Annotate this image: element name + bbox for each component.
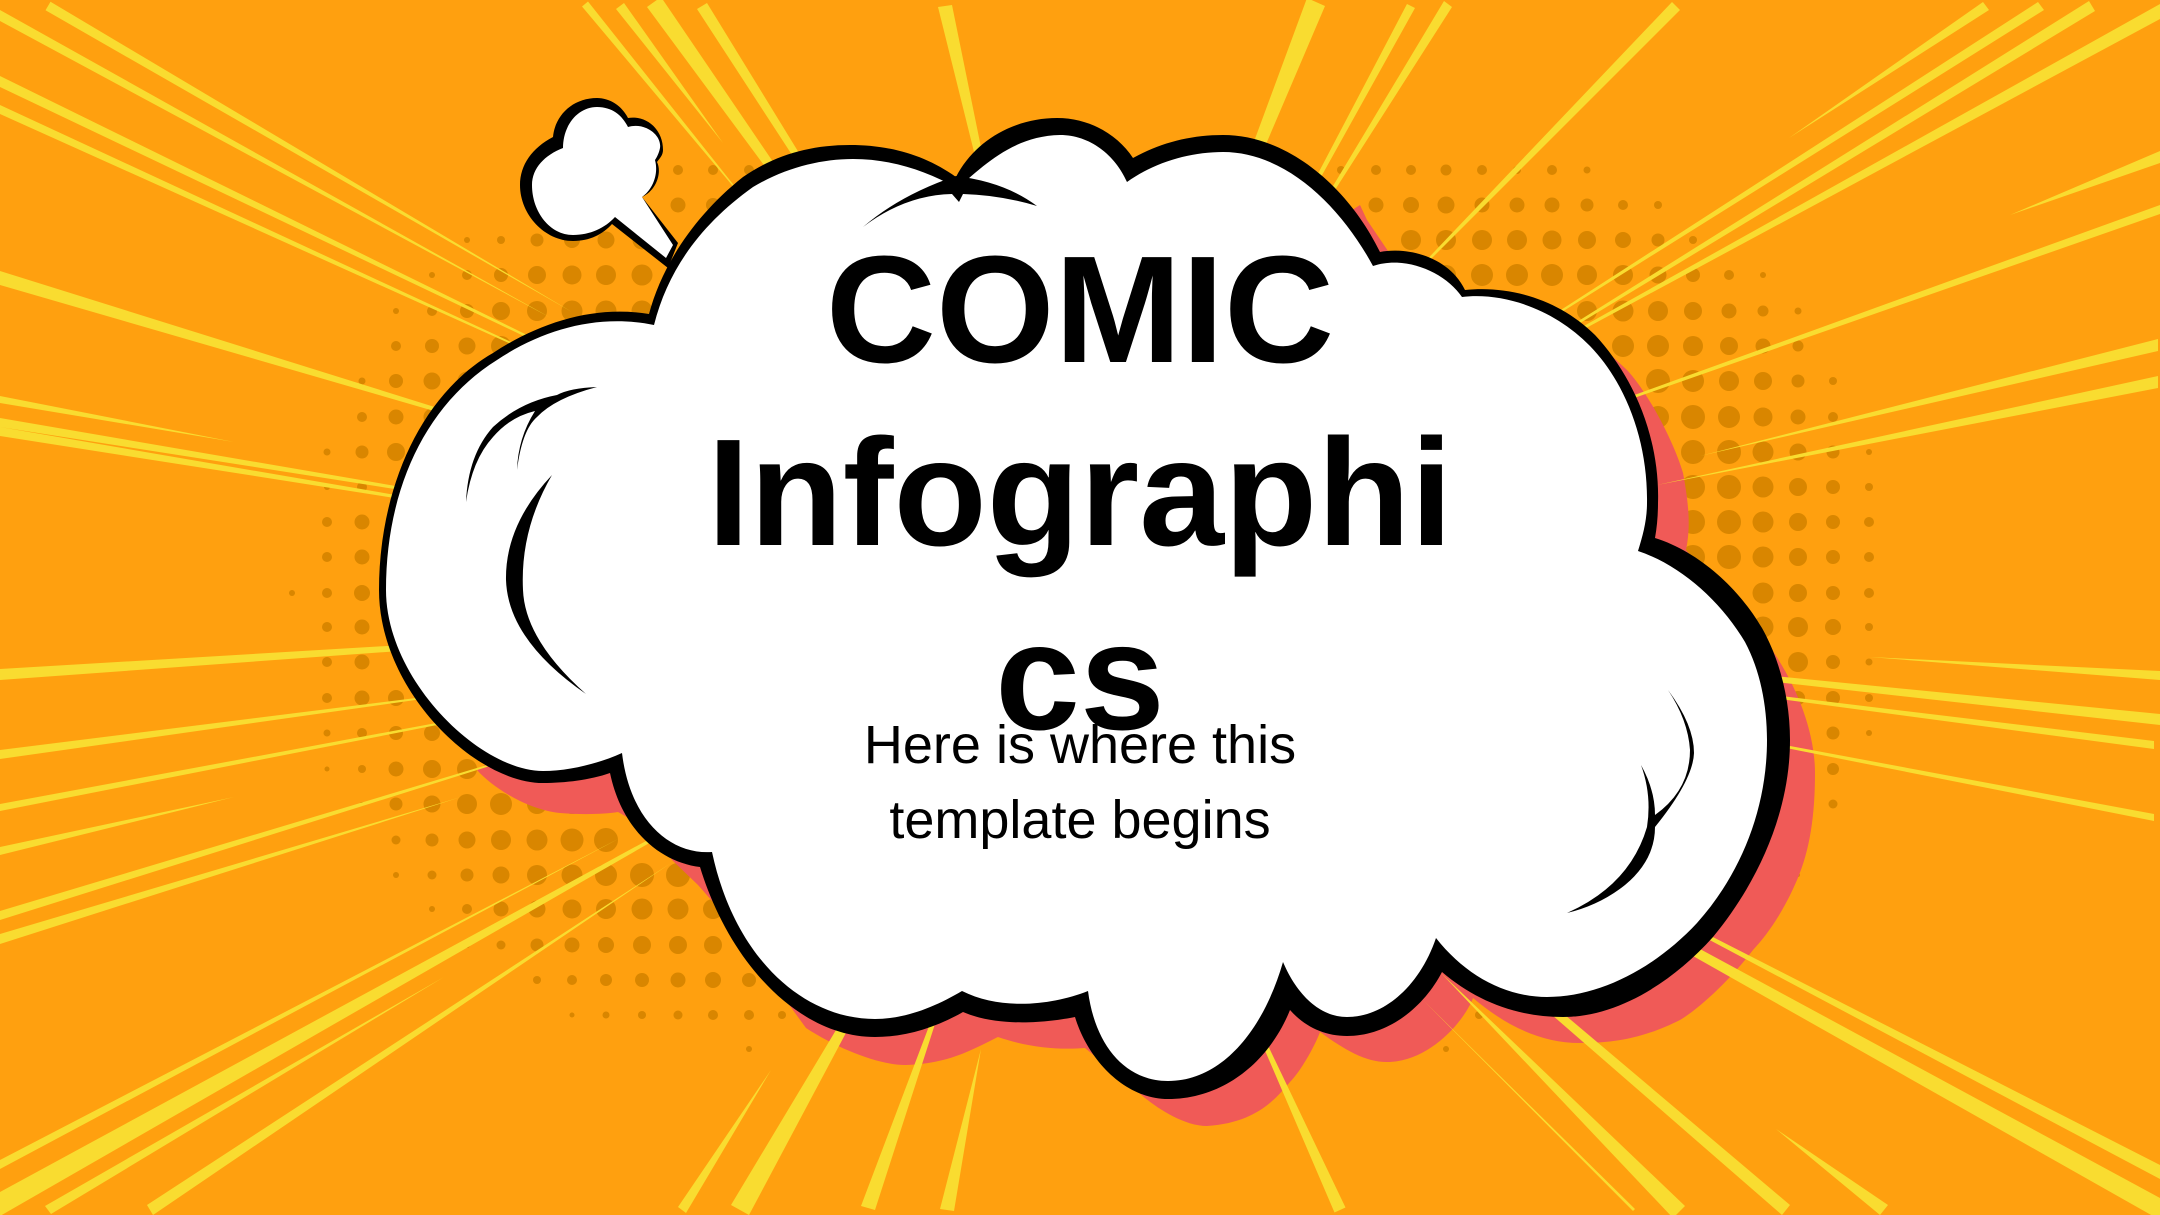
cloud white fill: [386, 135, 1767, 1081]
rays: top: [582, 0, 1680, 373]
title line 2: Infographi: [707, 408, 1453, 578]
crease: right: [1567, 690, 1694, 913]
subtitle line 1: Here is where this: [864, 715, 1296, 775]
halftone dots: [289, 164, 1874, 1052]
rays: left side: [0, 2, 840, 944]
main speech cloud: [379, 118, 1790, 1099]
red cloud shadow: [477, 205, 1815, 1126]
rays: right side: [1240, 1, 2160, 1215]
crease: top: [863, 176, 1037, 227]
puff fill: [532, 107, 673, 258]
rays: bottom: [0, 634, 1888, 1215]
crease: lower left: [506, 475, 586, 694]
small puff cloud: [520, 98, 678, 268]
title: [707, 225, 1453, 762]
puff outline: [520, 98, 678, 268]
cloud black outline: [379, 118, 1790, 1099]
title line 3: cs: [995, 592, 1165, 762]
title line 1: COMIC: [826, 225, 1334, 395]
subtitle line 2: template begins: [889, 790, 1271, 850]
crease: upper left: [466, 387, 597, 502]
subtitle: [864, 715, 1296, 850]
